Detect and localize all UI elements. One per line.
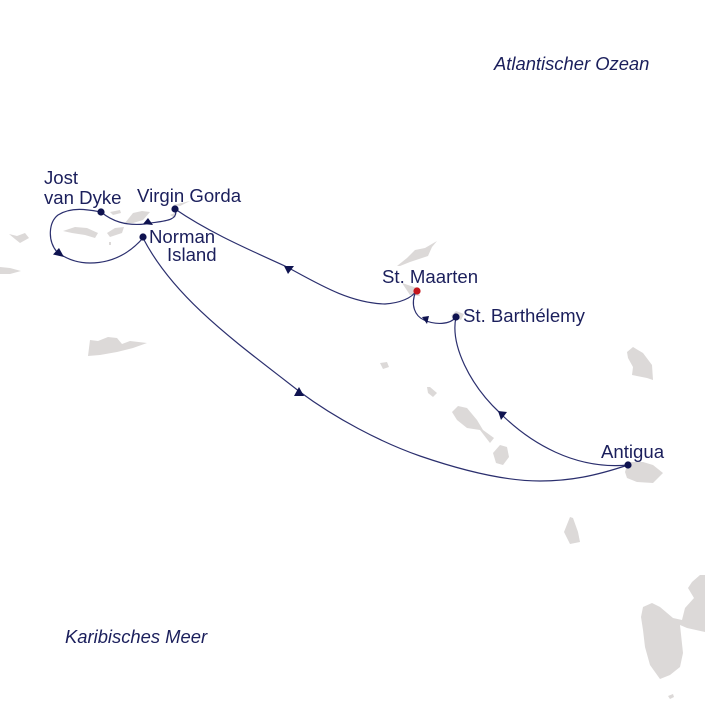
label: Norman Island: Norman [149,226,215,247]
label: Karibisches Meer: Karibisches Meer [65,626,208,647]
label: Jost van Dyke: Jost [44,167,79,188]
route [50,209,628,481]
label: Jost van Dyke: van Dyke [44,187,122,208]
label: Antigua: Antigua [601,441,665,462]
arrowheads [53,218,507,420]
islands [0,201,705,699]
label: Atlantischer Ozean: Atlantischer Ozean [493,53,649,74]
label: Norman Island: Island [167,244,217,265]
port markers [97,205,632,469]
label: St. Maarten: St. Maarten [382,266,478,287]
label: Virgin Gorda: Virgin Gorda [137,185,242,206]
label: St. Barthélemy: St. Barthélemy [463,305,586,326]
